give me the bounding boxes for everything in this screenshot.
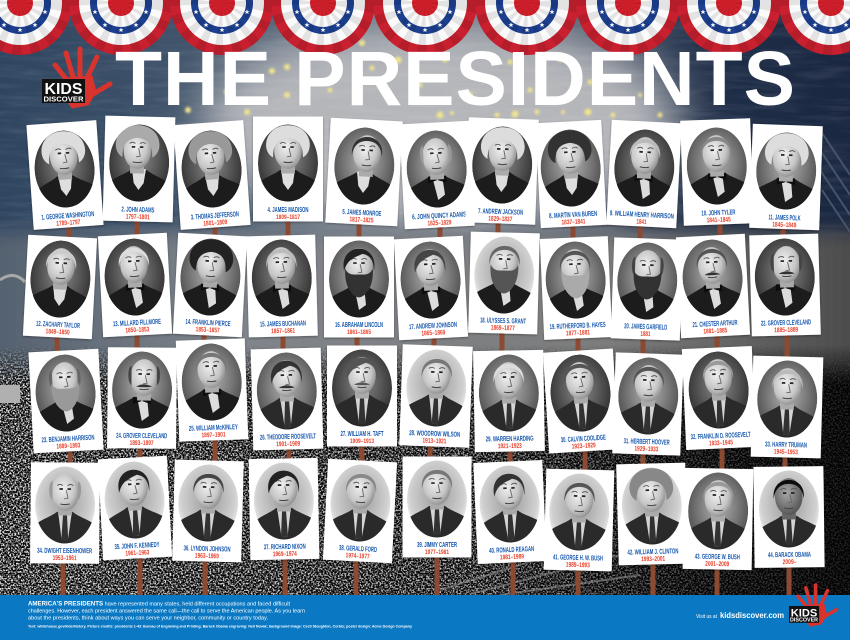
caption: J. Q. Adams (412, 210, 467, 228)
caption: Nixon (264, 542, 306, 558)
caption: Truman (765, 439, 807, 457)
portrait: Nixon (249, 462, 319, 542)
row 3 signs (28, 338, 823, 458)
caption: Carter: 39. JIMMY CARTER (417, 540, 457, 549)
caption: L. Johnson: 36. LYNDON JOHNSON (183, 543, 231, 554)
caption: Polk (768, 212, 801, 230)
sign: 16 Abraham Lincoln (324, 236, 394, 338)
caption: Harding: 1921–1923 (498, 443, 522, 450)
caption: Garfield (624, 321, 667, 339)
footer text block: AMERICA'S PRESIDENTS have represented many states, held different occupations and faced difficult (28, 600, 290, 608)
portrait: Carter (403, 460, 471, 539)
row 1 signs (26, 116, 823, 230)
caption: Taft: 27. WILLIAM H. TAFT (340, 429, 384, 438)
caption: Wilson: 28. WOODROW WILSON (409, 428, 460, 439)
caption: F. D. Roosevelt: 1933–1945 (709, 439, 733, 447)
portrait: G. H. W. Bush (544, 473, 614, 553)
sign: 27 William H. Taft (327, 346, 397, 446)
caption: Eisenhower: 1953–1961 (53, 555, 77, 562)
caption: Taylor: 1849–1850 (45, 328, 70, 337)
caption: Lincoln (335, 320, 383, 336)
sign: 1 George Washington (26, 120, 104, 230)
caption: Taft: 1909–1913 (350, 438, 374, 445)
caption: Madison: 1809–1817 (276, 214, 300, 221)
sign: 21 Chester Arthur (676, 234, 750, 338)
portrait: Taylor (30, 240, 90, 318)
logo: Kids Discover top: KIDS (44, 81, 83, 98)
caption: Monroe: 1817–1825 (349, 216, 374, 225)
caption: Monroe (342, 207, 382, 225)
caption: Taylor (35, 319, 81, 337)
portrait: G. W. Bush (683, 472, 753, 552)
caption: Polk: 1845–1849 (772, 222, 797, 229)
portrait: Jackson (472, 126, 532, 204)
logo: Kids Discover footer: DISCOVER (790, 618, 818, 624)
portrait: T. Roosevelt (252, 352, 322, 432)
caption: G. W. Bush: 2001–2009 (705, 561, 729, 568)
sign: 35 John F. Kennedy (98, 456, 172, 560)
caption: McKinley (189, 422, 238, 440)
caption: Grant: 18. ULYSSES S. GRANT (480, 315, 526, 326)
caption: Hoover (623, 436, 670, 454)
caption: Van Buren (549, 209, 598, 227)
portrait: Jefferson (182, 130, 242, 208)
portrait: Pierce (180, 238, 240, 316)
caption: Adams: 1797–1801 (126, 214, 150, 221)
caption: J. Q. Adams: 6. JOHN QUINCY ADAMS (412, 210, 466, 221)
caption: Buchanan: 15. JAMES BUCHANAN (260, 318, 306, 329)
caption: Clinton (627, 546, 679, 564)
portrait: Truman (752, 360, 822, 440)
caption: Madison (268, 205, 308, 221)
caption: Truman: 1945–1953 (774, 449, 798, 456)
sign: 6 John Quincy Adams (399, 121, 475, 229)
caption: T. Roosevelt (260, 431, 317, 449)
sign: 24 Grover Cleveland (107, 347, 177, 449)
caption: Kennedy (114, 540, 160, 558)
caption: Wilson (409, 428, 460, 446)
portrait: Cleveland (108, 351, 176, 430)
footer band (0, 595, 850, 640)
sign: 14 Franklin Pierce (173, 233, 247, 337)
portrait: Coolidge (544, 353, 617, 435)
caption: G. W. Bush (695, 552, 740, 568)
portrait: L. Johnson (173, 464, 243, 544)
portrait: Adams (109, 124, 170, 202)
caption: Clinton: 42. WILLIAM J. CLINTON (627, 546, 679, 557)
sign: 9 William Henry Harrison (606, 120, 682, 228)
sign: 7 Andrew Jackson (465, 117, 539, 225)
portrait: Washington (34, 130, 95, 208)
caption: Wilson: 1913–1921 (422, 438, 447, 445)
caption: Cleveland (116, 431, 167, 447)
caption: Carter: 1977–1981 (425, 549, 449, 556)
caption: Clinton: 1993–2001 (641, 556, 665, 563)
sign: 36 Lyndon Johnson (172, 460, 244, 562)
portrait: Hoover (613, 356, 684, 437)
caption: Obama: 44. BARACK OBAMA (768, 550, 811, 559)
portrait: B. Harrison (30, 353, 102, 435)
caption: Lincoln: 1861–1865 (347, 329, 371, 336)
sign: 15 James Buchanan (246, 235, 318, 337)
caption: L. Johnson: 1963–1969 (195, 553, 219, 560)
sign posts (57, 215, 789, 596)
sign: 41 George H. W. Bush (544, 469, 614, 571)
caption: Obama (768, 550, 811, 566)
portrait: Ford (324, 463, 396, 545)
caption: Arthur: 1881–1885 (703, 327, 728, 336)
caption: T. Roosevelt: 26. THEODORE ROOSEVELT (260, 431, 316, 442)
logo: Kids Discover top: DISCOVER (44, 94, 84, 104)
caption: Taylor: 12. ZACHARY TAYLOR (36, 319, 81, 330)
footer text block: Text: whitehouse.gov/kids/history. Picture credits: presidents 1-43: Bureau of Engraving and Printing; Barack Obama engraving: Neil Novak; background image: Cecil Stoughton, Corbis; poster design: Acme Design Company (28, 625, 413, 629)
caption: Jefferson: 1801–1809 (203, 219, 228, 228)
sign: 18 Ulysses S. Grant (468, 232, 540, 334)
caption: Garfield: 20. JAMES GARFIELD (624, 321, 667, 332)
caption: Washington (41, 209, 95, 229)
row 2 signs (23, 232, 821, 341)
sign: 17 Andrew Johnson (394, 236, 468, 340)
caption: B. Harrison (41, 433, 95, 451)
caption: Eisenhower (37, 546, 93, 562)
caption: G. H. W. Bush: 41. GEORGE H. W. BUSH (553, 552, 603, 563)
caption: Adams: 2. JOHN ADAMS (121, 205, 155, 214)
caption: Tyler: 10. JOHN TYLER (701, 207, 736, 218)
caption: G. H. W. Bush (553, 552, 603, 570)
caption: Hoover: 31. HERBERT HOOVER (624, 436, 670, 447)
caption: Cleveland: 1893–1897 (130, 440, 154, 447)
caption: Nixon: 1969–1974 (273, 551, 297, 558)
sign: 32 Franklin D. Roosevelt (682, 346, 756, 450)
logo: Kids Discover footer: KIDS (791, 608, 818, 620)
portrait: Harding (474, 354, 544, 434)
caption: Cleveland: 1885–1889 (774, 327, 798, 334)
caption: Harding: 29. WARREN HARDING (486, 434, 534, 443)
sign: 13 Millard Fillmore (98, 233, 172, 337)
footer text block: challenges. However, each president answered the same call—the call to serve the American people. As you learn (28, 608, 305, 614)
portrait: Garfield (612, 241, 683, 322)
footer text block (28, 600, 413, 629)
caption: Reagan: 1981–1989 (500, 553, 524, 561)
caption: Kennedy: 1961–1963 (125, 549, 150, 558)
sign: 29 Warren Harding (473, 350, 545, 452)
portrait: Kennedy (99, 460, 171, 542)
sign: 30 Calvin Coolidge (543, 348, 619, 454)
portrait: Monroe (334, 128, 394, 204)
portrait: Arthur (677, 238, 749, 320)
caption: J. Q. Adams: 1825–1829 (427, 219, 452, 228)
caption: Monroe: 5. JAMES MONROE (342, 207, 382, 218)
caption: Obama: 2009– (783, 559, 797, 566)
caption: Buchanan: 1857–1861 (271, 328, 295, 335)
caption: A. Johnson: 1865–1869 (421, 329, 446, 338)
sign: 28 Woodrow Wilson (399, 344, 473, 448)
caption: Cleveland: 22. GROVER CLEVELAND (761, 317, 811, 328)
caption: Van Buren: 8. MARTIN VAN BUREN (549, 209, 597, 220)
caption: McKinley: 1897–1901 (201, 432, 226, 439)
portrait: Eisenhower (31, 466, 99, 545)
portrait: A. Johnson (400, 242, 460, 318)
caption: Hoover: 1929–1933 (634, 446, 659, 453)
logo: Kids Discover footer (789, 585, 837, 626)
caption: B. Harrison: 23. BENJAMIN HARRISON (41, 433, 95, 444)
caption: W. H. Harrison: 1841 (636, 219, 647, 226)
sign: 38 Gerald Ford (323, 459, 397, 563)
caption: Jefferson: 3. THOMAS JEFFERSON (191, 209, 239, 222)
portrait: Clinton (617, 467, 687, 547)
sign: 20 James Garfield (611, 237, 683, 341)
caption: Jefferson (191, 209, 240, 229)
sign: 39 Jimmy Carter (402, 456, 472, 558)
portrait: Wilson (401, 348, 472, 429)
sign: 22 Grover Cleveland (749, 234, 821, 336)
sign: 43 George W. Bush (683, 468, 753, 570)
sign: 26 Theodore Roosevelt (251, 348, 323, 450)
logo: Kids Discover top (42, 49, 110, 108)
caption: Fillmore: 1850–1853 (125, 326, 150, 335)
caption: Ford: 38. GERALD FORD (339, 543, 377, 554)
caption: Nixon: 37. RICHARD NIXON (264, 542, 306, 551)
caption: Grant (480, 315, 526, 333)
bunting row (0, 0, 850, 55)
row 4 signs (30, 456, 825, 571)
caption: Tyler: 1841–1845 (707, 217, 731, 224)
caption: T. Roosevelt: 1901–1909 (276, 441, 300, 448)
sign: 11 James Polk (749, 124, 823, 230)
portrait: Madison (258, 124, 318, 202)
caption: Buchanan (260, 318, 306, 336)
caption: Washington: 1789–1797 (56, 219, 81, 228)
caption: G. W. Bush: 43. GEORGE W. BUSH (695, 552, 740, 561)
portrait: Polk (756, 132, 816, 210)
caption: Washington: 1. GEORGE WASHINGTON (41, 209, 95, 222)
caption: A. Johnson (409, 320, 458, 338)
portrait: Cleveland (750, 238, 820, 318)
caption: Adams (121, 205, 155, 221)
sign: 2 John Adams (103, 116, 175, 222)
caption: Lincoln: 16. ABRAHAM LINCOLN (335, 320, 383, 329)
caption: Reagan (489, 544, 535, 562)
portrait: Grant (474, 236, 534, 314)
caption: L. Johnson (183, 543, 231, 561)
portrait: W. H. Harrison (614, 130, 674, 206)
caption: Harding (486, 434, 534, 450)
portrait: McKinley (176, 342, 247, 423)
title: THE PRESIDENTS (115, 36, 795, 122)
caption: Cleveland (761, 317, 811, 335)
portrait: Buchanan (252, 240, 312, 316)
portrait: Obama (754, 470, 823, 549)
caption: Hayes (549, 320, 606, 338)
caption: A. Johnson: 17. ANDREW JOHNSON (409, 320, 457, 331)
caption: Fillmore (113, 317, 162, 335)
sign: 12 Zachary Taylor (23, 235, 97, 339)
caption: Coolidge (561, 433, 607, 451)
caption: Reagan: 40. RONALD REAGAN (489, 544, 534, 555)
sign: 23 Benjamin Harrison (28, 349, 104, 453)
caption: G. H. W. Bush: 1989–1993 (566, 562, 590, 569)
caption: Arthur: 21. CHESTER ARTHUR (692, 318, 738, 329)
portrait: Hayes (540, 240, 611, 321)
caption: Ford (338, 543, 377, 561)
caption: W. H. Harrison (609, 208, 674, 228)
caption: Truman: 33. HARRY TRUMAN (765, 439, 807, 450)
portrait: J. Q. Adams (406, 130, 467, 208)
caption: Jackson (478, 206, 523, 224)
sign: 4 James Madison (253, 116, 323, 222)
portrait: Tyler (686, 128, 747, 204)
sign: 19 Rutherford B. Hayes (540, 236, 612, 340)
caption: Hayes: 19. RUTHERFORD B. HAYES (549, 320, 606, 331)
sign: 40 Ronald Reagan (473, 460, 547, 564)
portrait: Taft (328, 350, 396, 428)
portrait: Lincoln (329, 240, 389, 318)
caption: Polk: 11. JAMES POLK (768, 212, 801, 223)
sign: 10 John Tyler (680, 118, 754, 226)
sign: 3 Thomas Jefferson (173, 120, 251, 230)
portrait: F. D. Roosevelt (683, 350, 754, 431)
portrait: Van Buren (540, 130, 601, 206)
sign: 42 William J. Clinton (616, 463, 688, 565)
caption: Pierce (185, 317, 231, 335)
sign: 37 Richard Nixon (249, 458, 319, 560)
caption: Arthur (692, 318, 738, 336)
sign: 33 Harry Truman (751, 356, 823, 458)
caption: Carter (417, 540, 457, 556)
caption: Madison: 4. JAMES MADISON (268, 205, 308, 214)
caption: Taft (340, 429, 384, 445)
footer text block: about the presidents, think about ways you can serve your neighbor, community or country today. (28, 616, 268, 622)
caption: Pierce: 1853–1857 (195, 326, 220, 335)
caption: Coolidge: 1923–1929 (572, 442, 596, 451)
caption: Jackson: 7. ANDREW JACKSON (478, 206, 523, 217)
website line: Visit us at (696, 614, 718, 620)
caption: Garfield: 1881 (640, 331, 651, 338)
sign: 44 Barack Obama (753, 466, 825, 568)
caption: Tyler (701, 207, 736, 225)
caption: Van Buren: 1837–1841 (561, 218, 586, 227)
caption: Fillmore: 13. MILLARD FILLMORE (113, 317, 161, 328)
caption: F. D. Roosevelt (690, 430, 751, 448)
caption: Cleveland: 24. GROVER CLEVELAND (116, 431, 167, 440)
caption: B. Harrison: 1889–1893 (56, 442, 81, 451)
caption: Eisenhower: 34. DWIGHT EISENHOWER (37, 546, 93, 555)
stage lights (185, 40, 662, 118)
caption: Ford: 1974–1977 (345, 552, 370, 561)
caption: Kennedy: 35. JOHN F. KENNEDY (114, 540, 160, 551)
caption: F. D. Roosevelt: 32. FRANKLIN D. ROOSEVELT (690, 430, 751, 441)
sign: 5 James Monroe (325, 118, 403, 226)
caption: Pierce: 14. FRANKLIN PIERCE (185, 317, 231, 328)
portrait: Fillmore (104, 238, 164, 316)
caption: McKinley: 25. WILLIAM McKINLEY (189, 422, 238, 433)
sign: 25 William McKinley (176, 338, 248, 442)
sign: 8 Martin Van Buren (534, 120, 608, 228)
caption: Jackson: 1829–1837 (488, 216, 513, 223)
caption: Hayes: 1877–1881 (566, 329, 590, 337)
sign: 34 Dwight Eisenhower (30, 462, 100, 564)
caption: Grant: 1869–1877 (491, 325, 515, 332)
portrait: Reagan (474, 464, 545, 545)
caption: W. H. Harrison: 9. WILLIAM HENRY HARRISON (610, 208, 674, 221)
caption: Coolidge: 30. CALVIN COOLIDGE (561, 433, 606, 444)
website line: kidsdiscover.com (720, 611, 784, 620)
sign: 31 Herbert Hoover (612, 352, 684, 456)
